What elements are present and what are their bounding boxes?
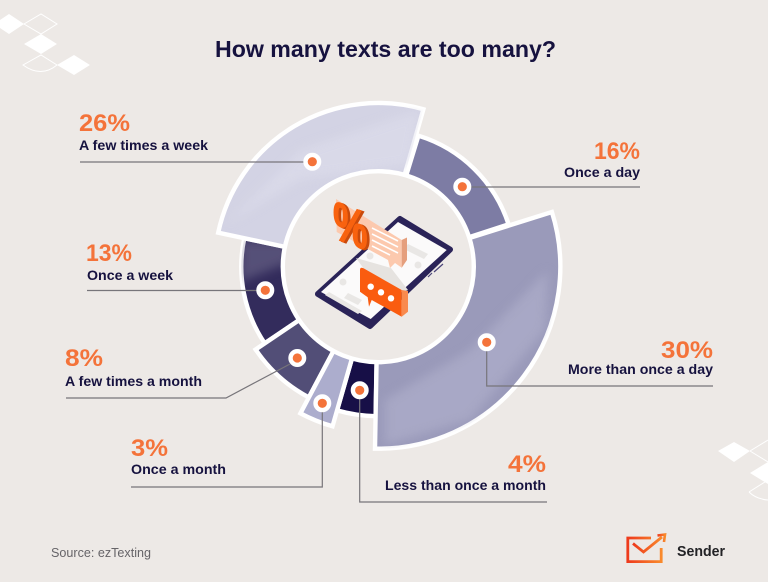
phone speaker (418, 230, 426, 234)
label: 8% a few times a month: 8% (65, 345, 103, 372)
label: 26% a few times a week (79, 110, 208, 153)
pink bubble (336, 199, 407, 268)
icon: envelope with arrow (628, 534, 665, 562)
screen UI blocks (325, 244, 428, 314)
decoration: top-left diamonds (0, 14, 90, 75)
percent sign: % (333, 190, 368, 263)
label: 26% a few times a week: 26% (79, 110, 130, 137)
marker: 16% (456, 180, 469, 194)
segment: 30% more than once a day (375, 212, 560, 449)
logo: Sender (628, 534, 725, 562)
label: 16% once a day: Once a day (564, 164, 640, 180)
marker: 30% (480, 336, 494, 349)
label: 8% a few times a month (65, 345, 202, 389)
label: 13% once a week: 13% (86, 240, 132, 267)
label: 16% once a day (564, 138, 640, 180)
label: 13% once a week (86, 240, 173, 283)
label: 3% once a month: 3% (131, 435, 168, 462)
icon: phone with chat bubbles (318, 190, 450, 326)
markers (258, 155, 494, 410)
label: 4% less than once a month: 4% (508, 451, 546, 478)
segment: 16% once a day (378, 136, 509, 267)
orange bubble (360, 268, 408, 317)
label: 16% once a day: 16% (594, 138, 640, 165)
label: 30% more than once a day: More than once a day (568, 361, 713, 377)
label: 3% once a month (131, 435, 226, 477)
label: 4% less than once a month (385, 451, 546, 493)
center disc (283, 171, 474, 362)
label: 26% a few times a week: A few times a week (79, 137, 208, 153)
light beam (356, 258, 408, 300)
segment: 13% once a week (239, 240, 296, 342)
label: 30% more than once a day (568, 337, 713, 377)
label: 30% more than once a day: 30% (661, 337, 713, 364)
label: 13% once a week: Once a week (87, 267, 173, 283)
decoration: bottom-right diamonds (718, 440, 768, 500)
label: 8% a few times a month: A few times a month (65, 373, 202, 389)
segment: 26% a few times a week (218, 103, 423, 267)
source note: Source: ezTexting (51, 546, 151, 560)
marker: 8% (290, 351, 304, 365)
segment: 4% less than once a month (337, 267, 378, 416)
percent sign: % (336, 191, 370, 264)
marker: 26% (306, 155, 319, 168)
wordmark: Sender (677, 543, 725, 560)
marker: 4% (353, 384, 367, 397)
label: 3% once a month: Once a month (131, 461, 226, 477)
segment: 3% once a month (300, 267, 378, 426)
phone side buttons (428, 264, 443, 277)
title: How many texts are too many? (215, 36, 556, 62)
leader lines (66, 162, 713, 502)
marker: 3% (316, 396, 329, 410)
donut chart (218, 103, 560, 449)
phone screen (321, 222, 447, 319)
label: 4% less than once a month: Less than once a month (385, 477, 546, 493)
segment: 8% a few times a month (256, 267, 378, 397)
phone body (318, 219, 450, 326)
marker: 13% (258, 284, 272, 297)
